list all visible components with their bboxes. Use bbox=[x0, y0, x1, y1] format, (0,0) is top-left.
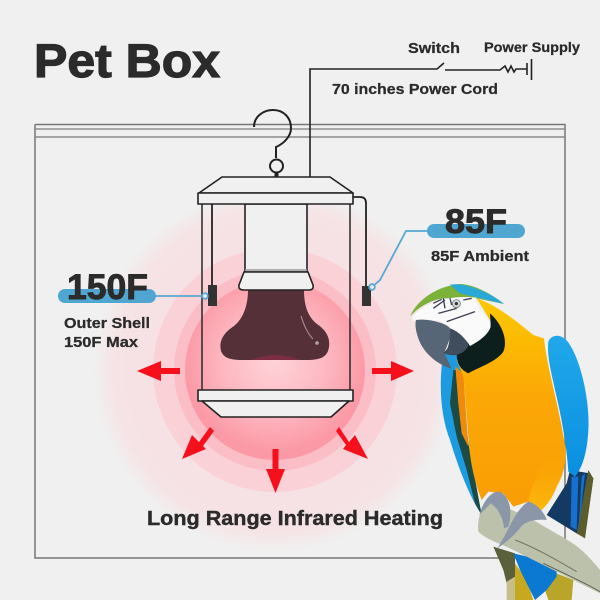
connector left bbox=[150, 293, 208, 299]
arrow down-right bbox=[336, 427, 368, 459]
badge: 150F: 150F bbox=[67, 268, 148, 307]
parrot perch bbox=[478, 503, 600, 593]
badge: 85F bbox=[427, 203, 525, 241]
lamp rods bbox=[202, 204, 350, 390]
parrot beak bbox=[415, 320, 452, 369]
parrot right wing bbox=[548, 336, 589, 477]
text: ambient: 85F Ambient bbox=[431, 249, 529, 265]
parrot left wing bbox=[441, 353, 482, 515]
hook bbox=[254, 110, 291, 177]
parrot right wing dark bbox=[547, 470, 593, 537]
parrot bbox=[410, 284, 600, 600]
arrow down-left bbox=[182, 427, 214, 459]
lamp fixture bbox=[198, 177, 366, 417]
power circuit bbox=[310, 59, 532, 177]
pet box outline bbox=[35, 124, 565, 558]
sensor right bbox=[362, 286, 371, 306]
label: power cord: 70 inches Power Cord bbox=[332, 82, 498, 98]
caption: Long Range Infrared Heating bbox=[147, 508, 443, 530]
badge: 85F: 85F bbox=[445, 203, 507, 241]
parrot tail bbox=[493, 547, 515, 583]
lamp neck bbox=[245, 204, 307, 272]
arrow left bbox=[137, 361, 180, 381]
lamp top cap bbox=[199, 177, 353, 193]
arrow right bbox=[372, 361, 414, 381]
parrot eye bbox=[452, 300, 460, 308]
heat glow circles bbox=[93, 188, 457, 552]
lamp bottom base bbox=[198, 390, 353, 401]
label: switch: Switch bbox=[408, 41, 460, 57]
lamp collar bbox=[239, 272, 313, 290]
arrow down bbox=[266, 449, 285, 493]
heat arrows bbox=[137, 361, 414, 493]
parrot cap bbox=[410, 284, 504, 317]
text: outer shell: 150F Max bbox=[64, 335, 138, 351]
text: outer shell bbox=[64, 316, 150, 351]
title: Pet Box bbox=[34, 34, 220, 87]
parrot bib bbox=[443, 313, 505, 373]
label: power supply: Power Supply bbox=[484, 40, 581, 55]
text: outer shell: Outer Shell bbox=[64, 316, 150, 332]
lamp cable bbox=[353, 197, 366, 288]
parrot body bbox=[457, 298, 566, 512]
sensor left bbox=[208, 285, 217, 306]
parrot orange stripe bbox=[455, 367, 468, 447]
parrot claws bbox=[479, 492, 510, 528]
connector right bbox=[369, 231, 430, 290]
parrot face patch bbox=[412, 297, 491, 346]
infrared bulb bbox=[220, 290, 329, 360]
